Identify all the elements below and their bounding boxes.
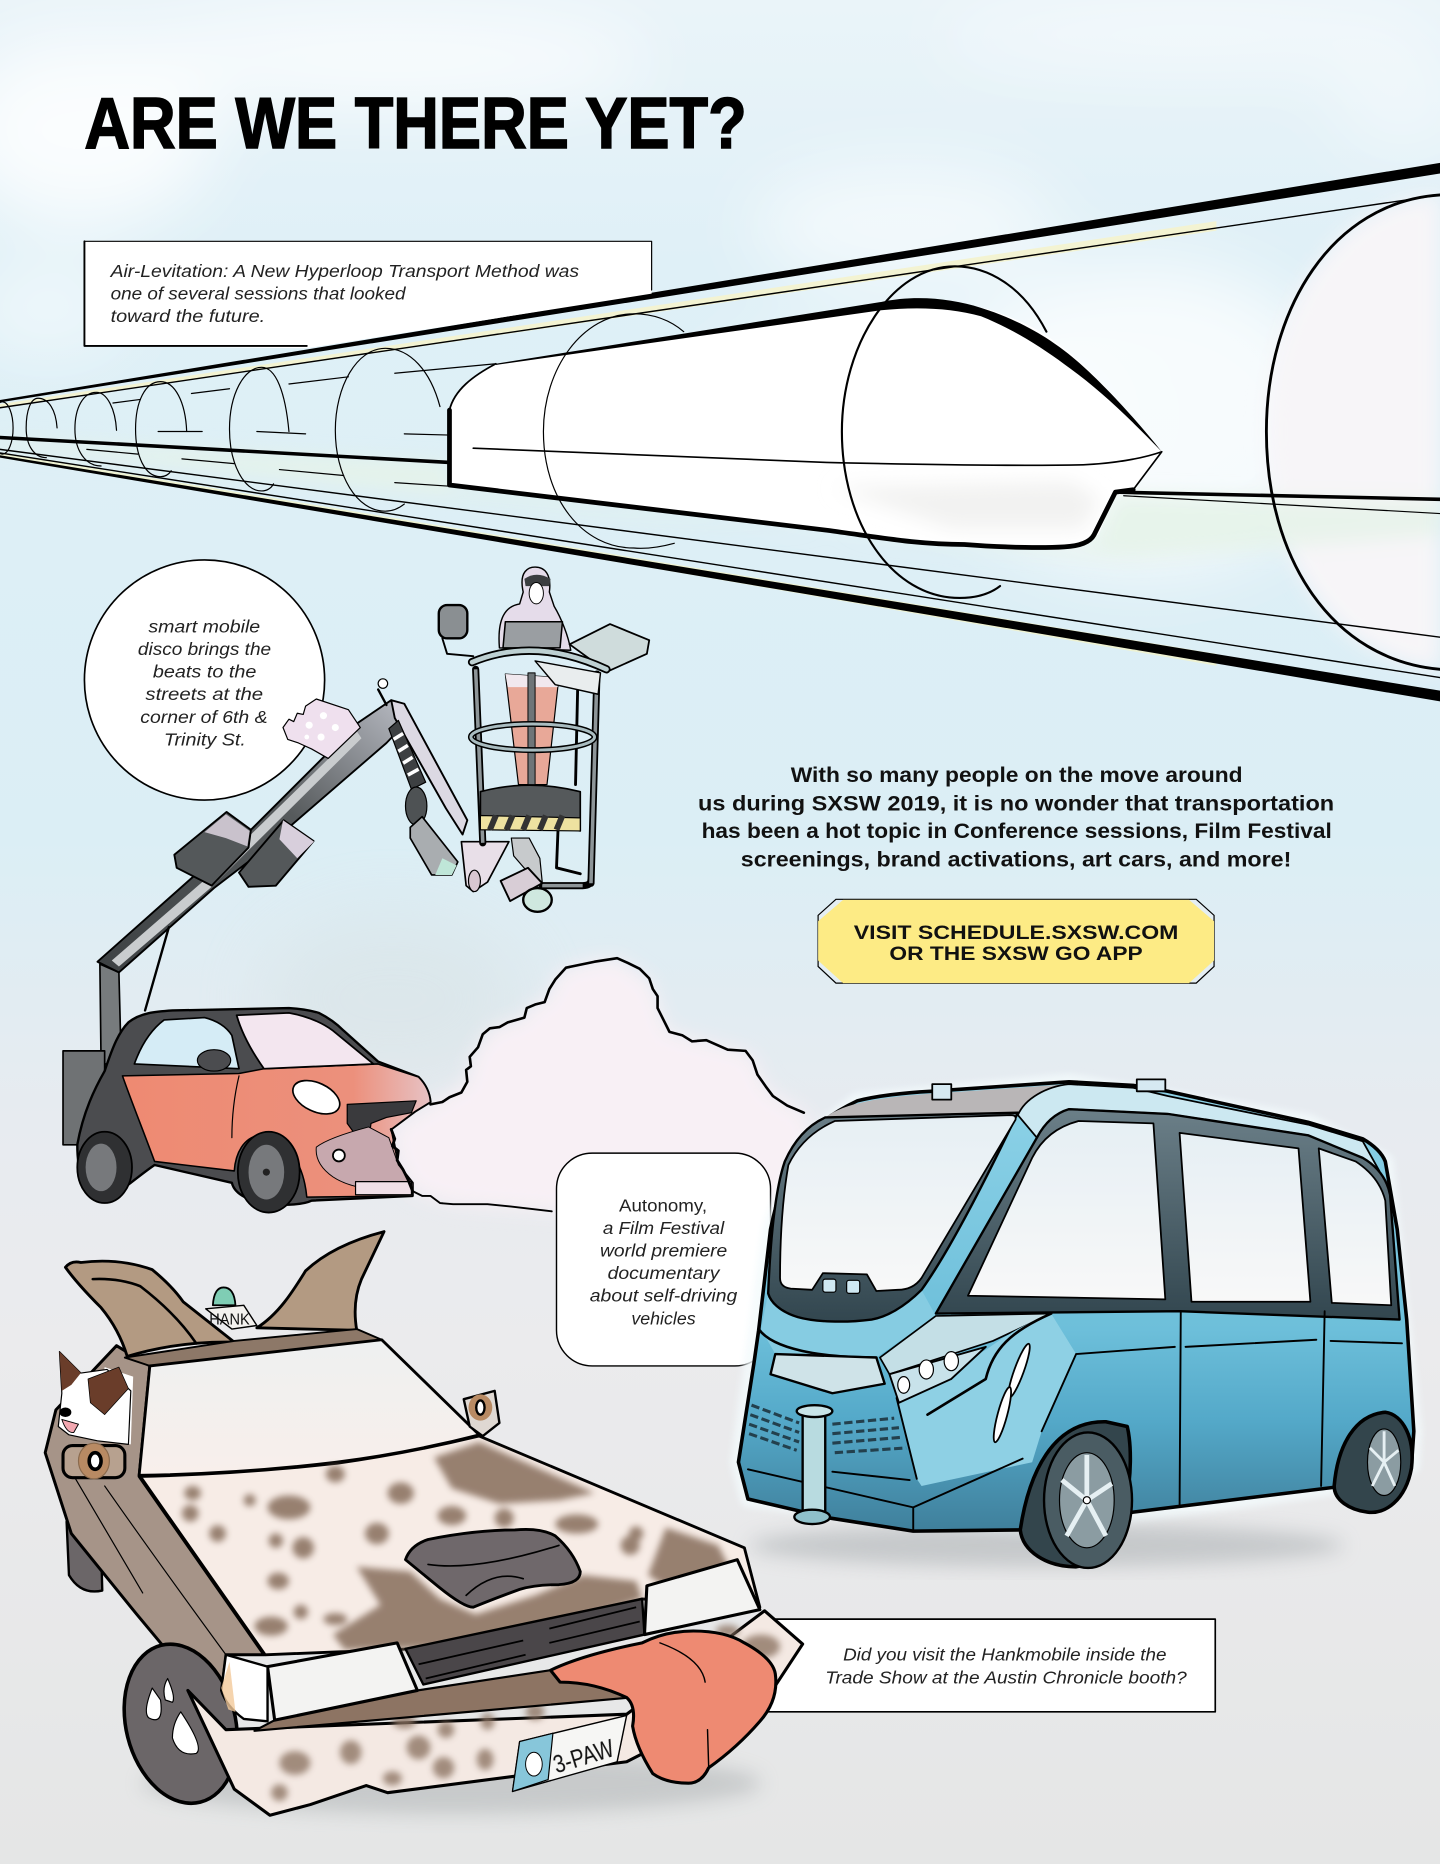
front light-blue fascia <box>761 1290 936 1358</box>
taxi sign: HANK <box>209 1311 250 1328</box>
pod body <box>449 298 1162 548</box>
camera <box>501 868 542 901</box>
mid rings <box>471 724 595 750</box>
illustration: smart car <box>63 1008 430 1213</box>
ears <box>65 1232 384 1366</box>
body text: screenings, brand activations, art cars, and more! <box>741 848 1291 872</box>
tube top rails <box>0 163 1440 408</box>
tube bottom rails <box>0 437 1440 701</box>
person torso and head <box>499 567 571 650</box>
taxi sign <box>206 1287 257 1329</box>
title: ARE WE THERE YET? <box>84 83 747 164</box>
disco ball <box>283 699 360 758</box>
speakers <box>174 812 314 887</box>
callout: smart mobile disco: streets at the <box>145 684 263 704</box>
bus shadow and halo <box>738 1082 1414 1567</box>
front panel <box>880 1314 1051 1374</box>
body text: has been a hot topic in Conference sessions, Film Festival <box>702 819 1332 843</box>
side glass frame <box>936 1109 1400 1320</box>
car shadow <box>143 1752 761 1814</box>
callout: smart mobile disco: smart mobile <box>148 616 260 636</box>
callout: smart mobile disco: Trinity St. <box>164 729 246 749</box>
call to action badge <box>818 899 1214 983</box>
callout: Hankmobile: Did you visit the Hankmobile inside the <box>843 1645 1167 1665</box>
body text: With so many people on the move around <box>791 763 1243 787</box>
bumper <box>188 1611 803 1815</box>
boom arm <box>98 679 467 1064</box>
call to action badge: OR THE SXSW GO APP <box>889 943 1143 965</box>
grilles <box>749 1405 906 1453</box>
illustration: cherry picker lift <box>98 567 649 1064</box>
left mirror <box>63 1443 125 1479</box>
body lines <box>748 1311 1402 1531</box>
hood spots <box>182 1442 742 1650</box>
windshield glass <box>780 1115 1016 1291</box>
callout: smart mobile disco <box>84 560 325 800</box>
front wheel <box>1020 1422 1132 1568</box>
license plate: 3-PAW <box>550 1734 618 1779</box>
tube rings <box>0 195 1440 669</box>
front tire <box>108 1632 253 1815</box>
dog <box>58 1352 133 1444</box>
call to action badge: VISIT SCHEDULE.SXSW.COM <box>854 922 1178 944</box>
body text <box>698 763 1334 872</box>
callout: smart mobile disco: corner of 6th & <box>140 707 268 727</box>
hood <box>140 1436 760 1655</box>
table <box>570 624 649 672</box>
callout: Autonomy documentary: vehicles <box>631 1308 696 1328</box>
small speaker <box>439 605 467 638</box>
lift basket <box>439 567 649 912</box>
callout: hyperloop session: one of several sessions that looked <box>111 284 407 304</box>
callout: hyperloop session: toward the future. <box>111 306 265 326</box>
rear window <box>134 1018 239 1069</box>
front wheel <box>238 1132 300 1213</box>
front light band <box>771 1354 885 1393</box>
rear wheel <box>77 1132 132 1203</box>
windshield <box>237 1013 373 1069</box>
car side body <box>45 1346 264 1694</box>
front jagged edge <box>391 1129 413 1191</box>
callout: Autonomy documentary: Autonomy, <box>619 1195 707 1215</box>
illustration: hyperloop tube and pod <box>0 163 1440 701</box>
callout: smart mobile disco: disco brings the <box>138 639 271 659</box>
rear wheel <box>1334 1412 1412 1512</box>
hood scoop <box>405 1529 580 1607</box>
windshield <box>139 1340 479 1475</box>
right mirror <box>464 1391 499 1436</box>
roof panels <box>825 1084 1069 1117</box>
grille <box>405 1599 644 1684</box>
roof sensors <box>932 1084 951 1100</box>
front bollard <box>794 1405 832 1524</box>
light cluster <box>889 1347 986 1403</box>
laptop <box>503 622 562 648</box>
callout: Hankmobile <box>761 1619 1215 1712</box>
brown strip under lights <box>254 1670 630 1731</box>
hinge and lower gear <box>410 817 542 892</box>
tongue <box>551 1631 776 1783</box>
callout: Autonomy documentary: documentary <box>608 1263 721 1283</box>
callout: Autonomy documentary: a Film Festival <box>603 1218 725 1238</box>
side windows <box>968 1121 1165 1299</box>
grille <box>347 1101 416 1141</box>
platform with hazard stripe <box>480 785 580 831</box>
person legs <box>505 674 559 785</box>
callout: Hankmobile: Trade Show at the Austin Chronicle booth? <box>825 1667 1187 1687</box>
car body shell <box>77 1008 430 1205</box>
headlights <box>221 1560 760 1721</box>
illustration: autonomous shuttle bus <box>738 1079 1414 1568</box>
bus body <box>738 1082 1414 1531</box>
headlight <box>288 1074 345 1121</box>
illustration: Hankmobile dog car <box>45 1232 803 1815</box>
side oval lights <box>1005 1342 1033 1399</box>
top rail <box>472 651 606 669</box>
callout: Autonomy documentary: about self-driving <box>590 1286 738 1306</box>
rear box <box>63 1051 105 1145</box>
coral door and hood <box>122 1064 430 1197</box>
callout: Autonomy documentary: world premiere <box>600 1241 727 1261</box>
callout: smart mobile disco: beats to the <box>153 662 256 682</box>
rear wheel <box>67 1522 102 1591</box>
callout: hyperloop session: Air-Levitation: A New Hyperloop Transport Method was <box>109 261 580 281</box>
license plate <box>513 1715 627 1791</box>
callout: Autonomy documentary <box>556 1153 771 1366</box>
callout: hyperloop session <box>84 241 652 348</box>
windshield frame <box>768 1113 1018 1322</box>
tube haze <box>0 195 1440 669</box>
illustration: exhaust cloud <box>391 958 820 1213</box>
body text: us during SXSW 2019, it is no wonder that transportation <box>698 792 1334 816</box>
